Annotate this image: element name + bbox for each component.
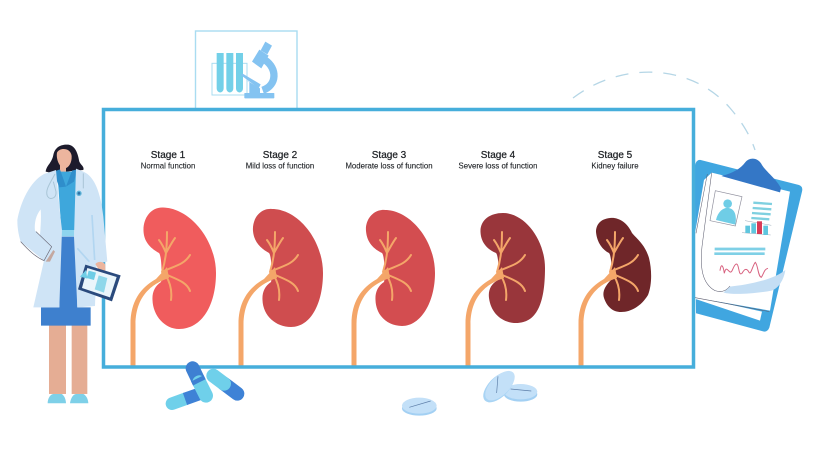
heading: stage 4: Stage 4 <box>481 150 516 161</box>
heading: stage 2: Stage 2 <box>263 150 298 161</box>
kidney: stage 5 <box>578 218 651 366</box>
kidney: stage 1 <box>130 207 216 366</box>
dashed arc <box>573 72 755 150</box>
stethoscope <box>47 173 83 198</box>
heading: stage 1: Normal function <box>141 162 195 170</box>
doctor <box>17 145 121 403</box>
kidney: stage 3 <box>352 210 435 366</box>
heading: stage 1: Stage 1 <box>151 150 186 161</box>
frame <box>104 110 694 367</box>
kidney: stage 4 <box>466 213 545 366</box>
hair <box>46 145 84 173</box>
heading: stage 5: Stage 5 <box>598 150 633 161</box>
heading: stage 5 <box>591 150 639 170</box>
skirt <box>41 237 91 326</box>
pills: capsules <box>172 368 237 404</box>
heading: stage 3: Stage 3 <box>372 150 407 161</box>
heading: stage 4 <box>459 150 537 170</box>
heading: stage 3: Moderate loss of function <box>345 162 433 170</box>
heading: stage 5: Kidney failure <box>591 162 639 170</box>
icon: test tubes and microscope panel <box>196 31 297 109</box>
kidney: stage 2 <box>238 209 323 366</box>
tablet <box>78 265 121 301</box>
heading: stage 4: Severe loss of function <box>459 162 537 170</box>
heading: stage 2 <box>246 150 314 170</box>
clipboard <box>693 159 802 332</box>
shoes <box>48 394 88 403</box>
legs <box>49 323 87 394</box>
face <box>57 149 72 175</box>
coat <box>17 170 62 307</box>
heading: stage 2: Mild loss of function <box>246 162 314 170</box>
shirt <box>57 172 77 230</box>
hand <box>95 262 105 277</box>
heading: stage 3 <box>345 150 433 170</box>
pills: tablets <box>402 366 537 416</box>
heading: stage 1 <box>141 150 195 170</box>
